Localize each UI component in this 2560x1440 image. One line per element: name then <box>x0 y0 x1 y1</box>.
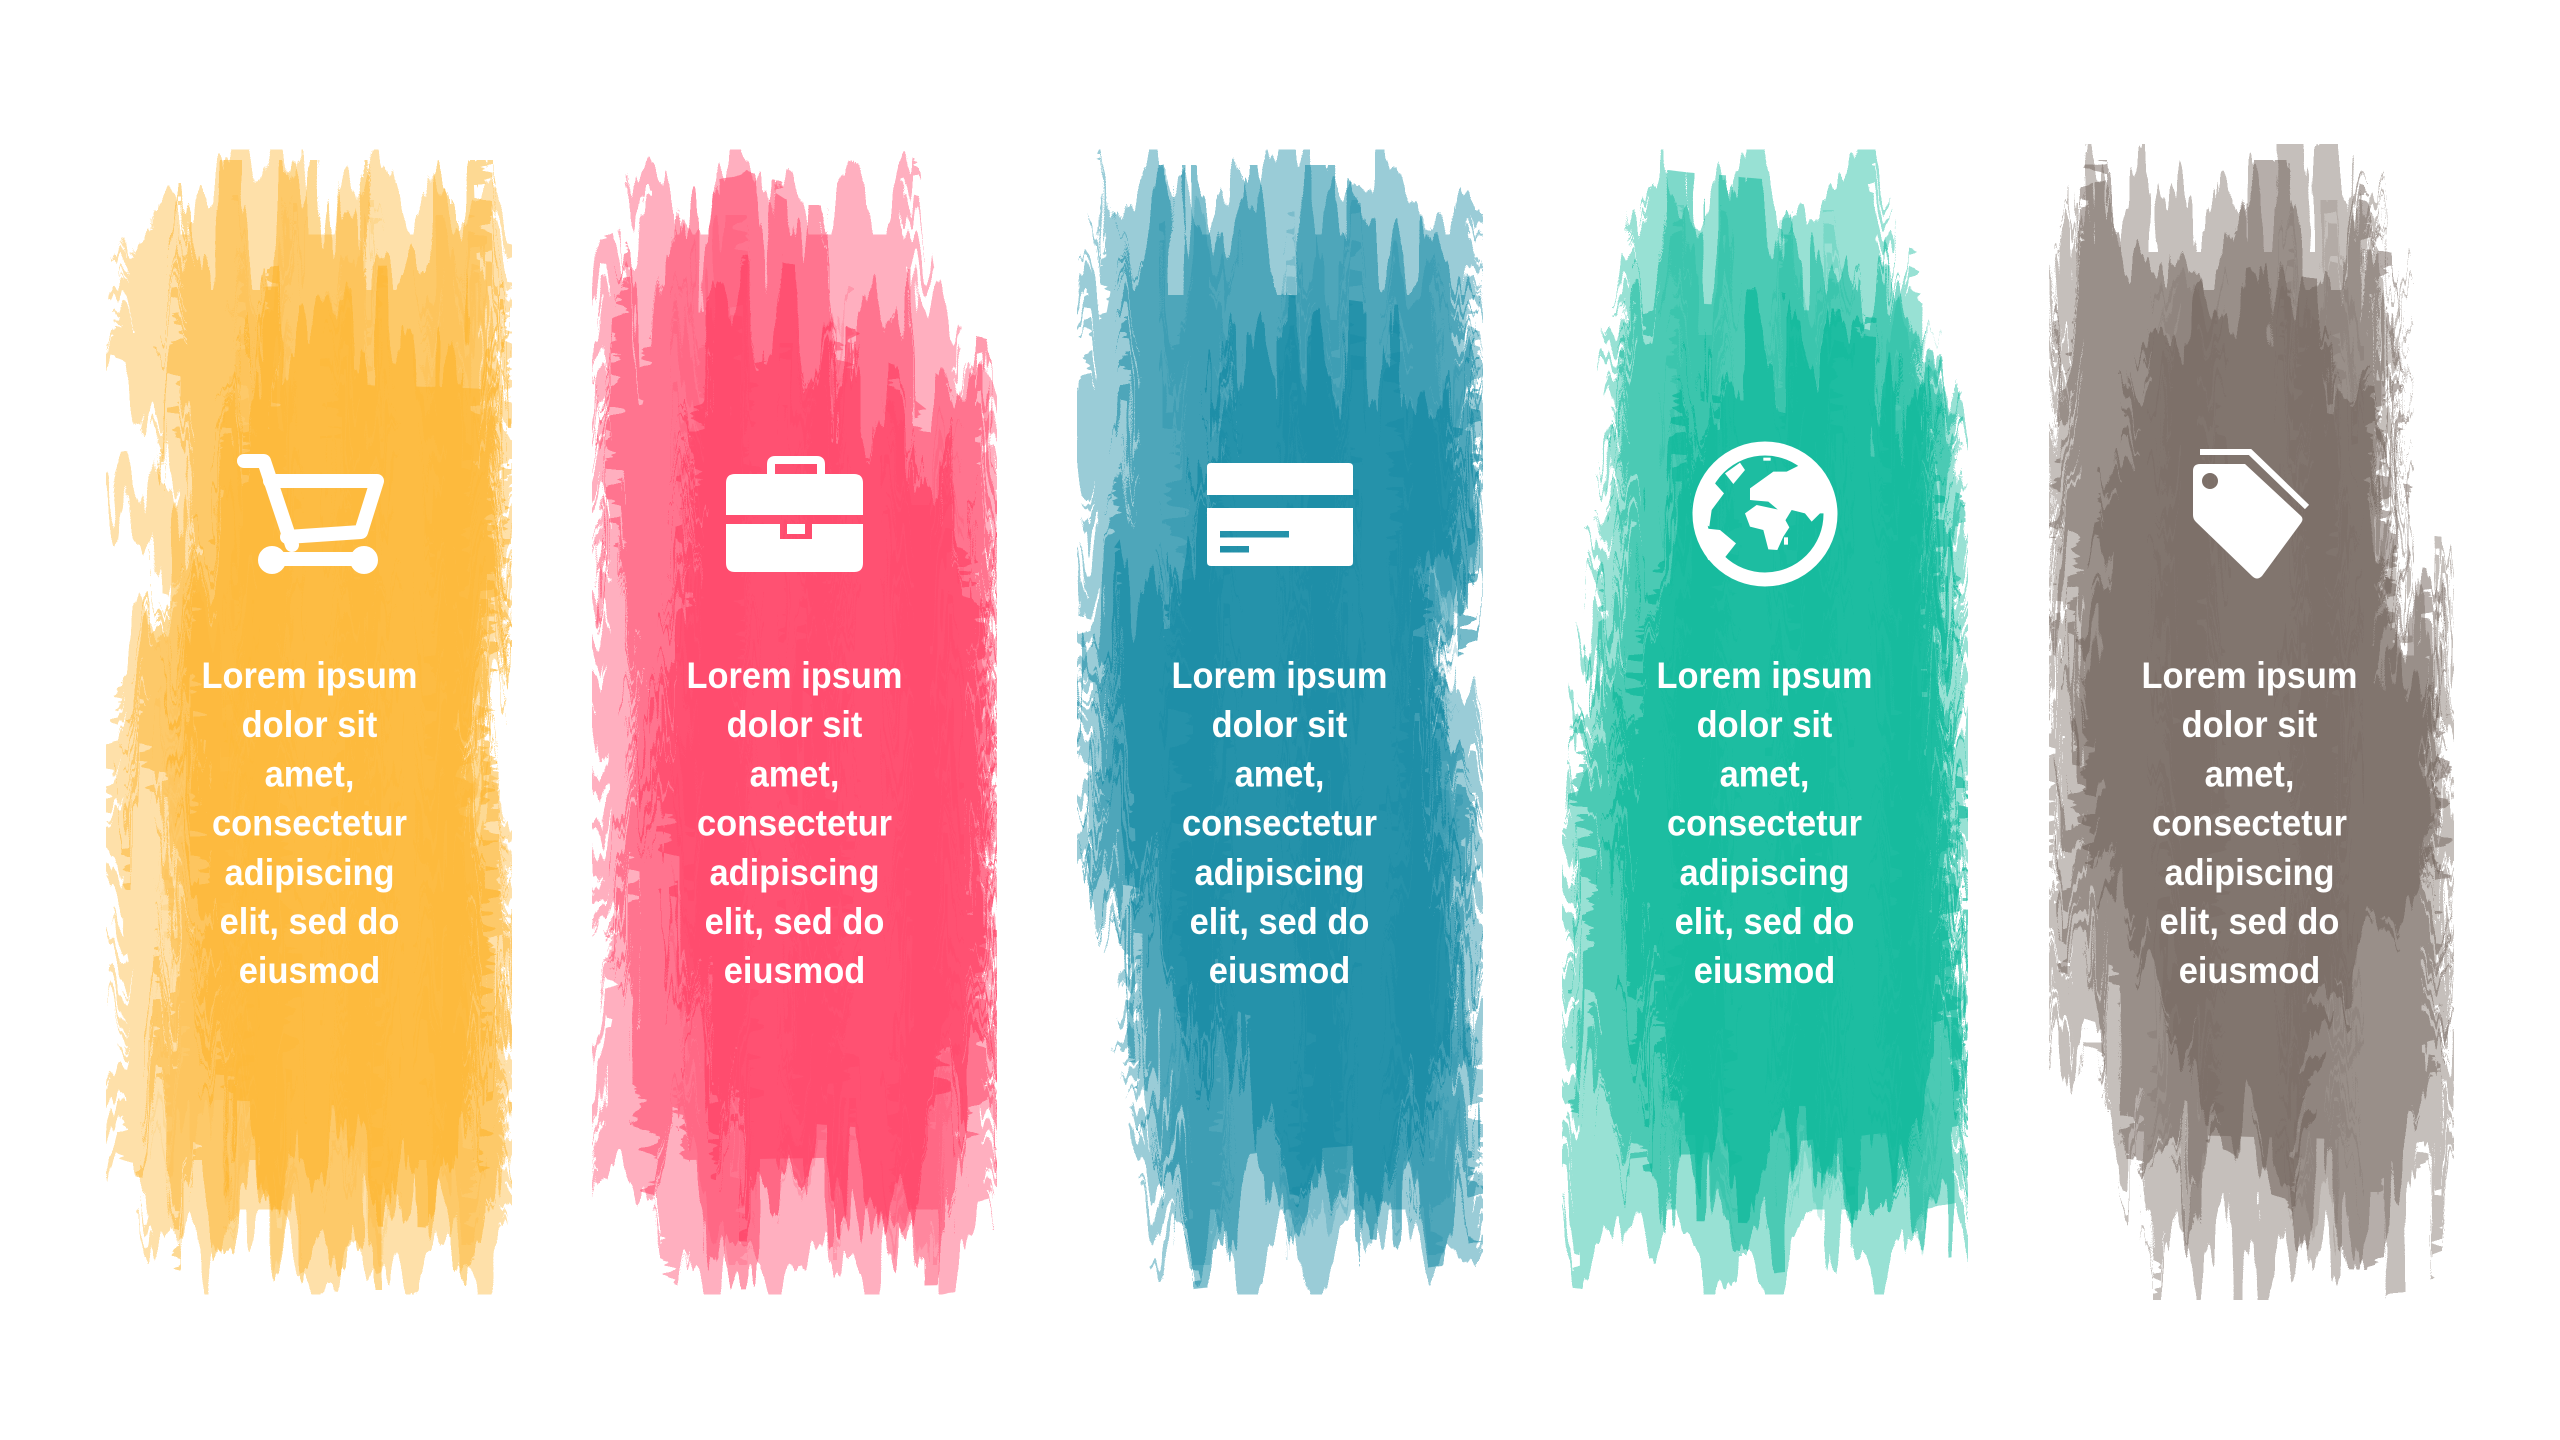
brush stroke: pink <box>592 192 997 1252</box>
text block: elit, sed do <box>1675 901 1854 942</box>
text block: elit, sed do <box>705 901 884 942</box>
text block: amet, <box>1235 753 1324 795</box>
text block: eiusmod <box>2179 950 2320 991</box>
text block: amet, <box>265 753 354 795</box>
text block: eiusmod <box>724 950 865 991</box>
brush stroke: yellow <box>108 192 512 1252</box>
text block: Lorem ipsum <box>2141 655 2358 696</box>
icon: globe <box>1700 448 1830 580</box>
text block: consectetur <box>1182 802 1377 844</box>
text block: dolor sit <box>2182 704 2317 745</box>
panel: brown column <box>2049 192 2454 1252</box>
brush stroke: green <box>1563 192 1968 1252</box>
text block: consectetur <box>697 802 892 844</box>
text block: elit, sed do <box>2160 901 2339 942</box>
text block: eiusmod <box>239 950 380 991</box>
text block: amet, <box>2205 753 2294 795</box>
panel: teal column <box>1078 192 1483 1252</box>
icon: briefcase <box>726 460 863 572</box>
panel: pink column <box>592 192 997 1252</box>
text block: dolor sit <box>1212 704 1347 745</box>
text block: dolor sit <box>1697 704 1832 745</box>
brush stroke: teal <box>1078 192 1483 1252</box>
text block: consectetur <box>212 802 407 844</box>
brush stroke: brown <box>2049 192 2454 1252</box>
text block: elit, sed do <box>1190 901 1369 942</box>
text block: adipiscing <box>2164 852 2335 893</box>
panel: yellow column <box>108 192 512 1252</box>
text block: amet, <box>1720 753 1809 795</box>
text block: consectetur <box>2152 802 2347 844</box>
text block: consectetur <box>1667 802 1862 844</box>
text block: Lorem ipsum <box>201 655 418 696</box>
text block: elit, sed do <box>220 901 399 942</box>
icon: price tag <box>2193 452 2307 578</box>
text block: eiusmod <box>1209 950 1350 991</box>
text block: dolor sit <box>242 704 377 745</box>
text block: dolor sit <box>727 704 862 745</box>
text block: adipiscing <box>1194 852 1365 893</box>
icon: shopping cart <box>244 461 377 567</box>
panel: green column <box>1563 192 1968 1252</box>
text block: adipiscing <box>224 852 395 893</box>
text block: eiusmod <box>1694 950 1835 991</box>
text block: adipiscing <box>709 852 880 893</box>
text block: Lorem ipsum <box>1656 655 1873 696</box>
text block: Lorem ipsum <box>686 655 903 696</box>
text block: adipiscing <box>1679 852 1850 893</box>
icon: credit card <box>1207 463 1353 566</box>
text block: Lorem ipsum <box>1171 655 1388 696</box>
text block: amet, <box>750 753 839 795</box>
